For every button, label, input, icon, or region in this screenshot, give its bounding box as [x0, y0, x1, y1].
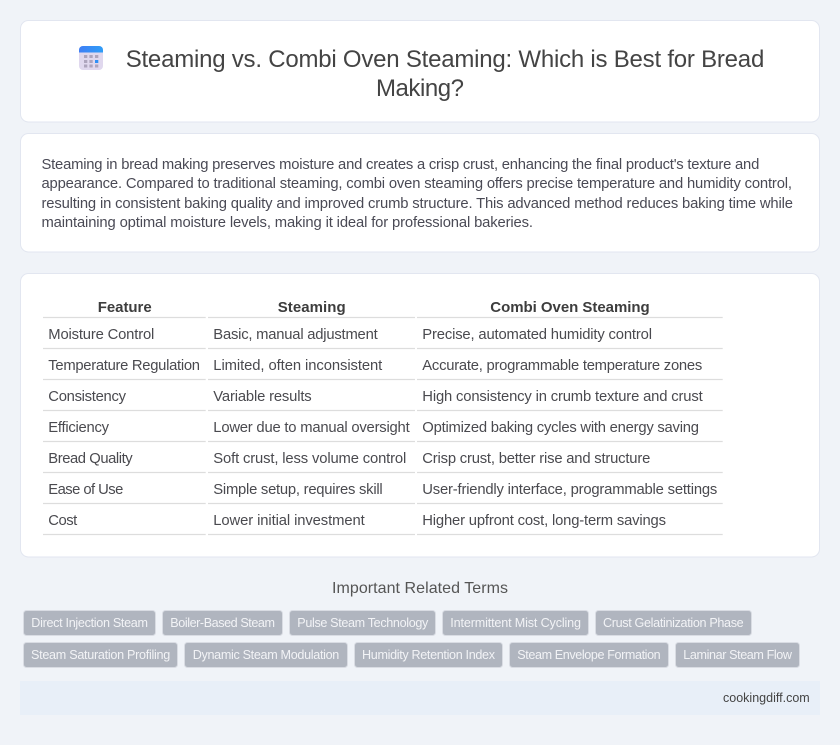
section heading: related terms: Important Related Terms — [332, 580, 508, 597]
tag — [354, 642, 502, 668]
tag — [290, 610, 436, 636]
row: moisture control: Precise, automated humidity control — [422, 327, 652, 343]
footer source text: cookingdiff.com — [723, 691, 810, 705]
tag: Steam Envelope Formation — [517, 648, 661, 662]
tag — [596, 610, 752, 636]
tag: Steam Saturation Profiling — [31, 648, 170, 662]
tag: Intermittent Mist Cycling — [450, 616, 581, 630]
row: ease of use: User-friendly interface, programmable settings — [422, 482, 717, 498]
row: ease of use — [48, 482, 717, 498]
row: temperature regulation: Limited, often inconsistent — [213, 358, 382, 374]
intro paragraph: resulting in consistent baking quality and improved crumb structure. This advanced method reduces baking time while — [42, 196, 793, 212]
table header row — [98, 299, 650, 316]
row: efficiency: Lower due to manual oversight — [213, 420, 410, 436]
tag — [24, 642, 178, 668]
row: efficiency: Optimized baking cycles with energy saving — [422, 420, 699, 436]
row: consistency: Consistency — [48, 389, 127, 405]
intro paragraph — [42, 157, 793, 231]
tag — [442, 610, 588, 636]
footer bar — [20, 681, 820, 715]
table header row: Feature — [98, 299, 152, 316]
title: Making? — [376, 75, 464, 102]
tag — [510, 642, 668, 668]
row: cost — [48, 513, 666, 529]
panel: title header — [20, 20, 820, 122]
tag: Dynamic Steam Modulation — [193, 648, 339, 662]
intro paragraph: appearance. Compared to traditional steaming, combi oven steaming offers precise temperature and humidity control, — [42, 176, 792, 192]
tag: Boiler-Based Steam — [170, 616, 275, 630]
row: bread quality — [48, 451, 650, 467]
table header row: Steaming — [278, 299, 346, 316]
row: temperature regulation: Temperature Regulation — [48, 358, 200, 374]
tag: Crust Gelatinization Phase — [603, 616, 744, 630]
row: bread quality: Crisp crust, better rise and structure — [422, 451, 650, 467]
panel: introduction — [20, 134, 820, 252]
tag list: related terms — [24, 610, 800, 668]
intro paragraph: Steaming in bread making preserves moisture and creates a crisp crust, enhancing the final product's texture and — [42, 157, 759, 173]
row: ease of use: Ease of Use — [48, 482, 123, 498]
title: Steaming vs. Combi Oven Steaming: Which is Best for Bread — [126, 46, 764, 73]
row: consistency: Variable results — [213, 389, 312, 405]
row: temperature regulation: Accurate, programmable temperature zones — [422, 358, 702, 374]
tag: Direct Injection Steam — [31, 616, 148, 630]
row: consistency: High consistency in crumb texture and crust — [422, 389, 703, 405]
icon: calendar — [79, 46, 103, 70]
row: cost: Higher upfront cost, long-term savings — [422, 513, 666, 529]
row: consistency — [48, 389, 703, 405]
row: efficiency: Efficiency — [48, 420, 110, 436]
row: temperature regulation — [48, 358, 702, 374]
row: bread quality: Bread Quality — [48, 451, 133, 467]
table header row: Combi Oven Steaming — [490, 299, 650, 316]
tag — [184, 642, 348, 668]
row: moisture control: Basic, manual adjustment — [213, 327, 378, 343]
tag — [162, 610, 282, 636]
intro paragraph: maintaining optimal moisture levels, making it ideal for professional bakeries. — [42, 215, 533, 231]
title — [126, 46, 764, 102]
row: efficiency — [48, 420, 699, 436]
tag — [24, 610, 156, 636]
row: ease of use: Simple setup, requires skill — [213, 482, 383, 498]
tag: Humidity Retention Index — [362, 648, 496, 662]
row: bread quality: Soft crust, less volume control — [213, 451, 406, 467]
row: moisture control: Moisture Control — [48, 327, 154, 343]
panel: comparison table — [20, 274, 820, 557]
tag — [676, 642, 800, 668]
row: moisture control — [48, 327, 652, 343]
tag: Pulse Steam Technology — [297, 616, 429, 630]
row: cost: Lower initial investment — [213, 513, 365, 529]
row: cost: Cost — [48, 513, 77, 529]
tag: Laminar Steam Flow — [683, 648, 793, 662]
